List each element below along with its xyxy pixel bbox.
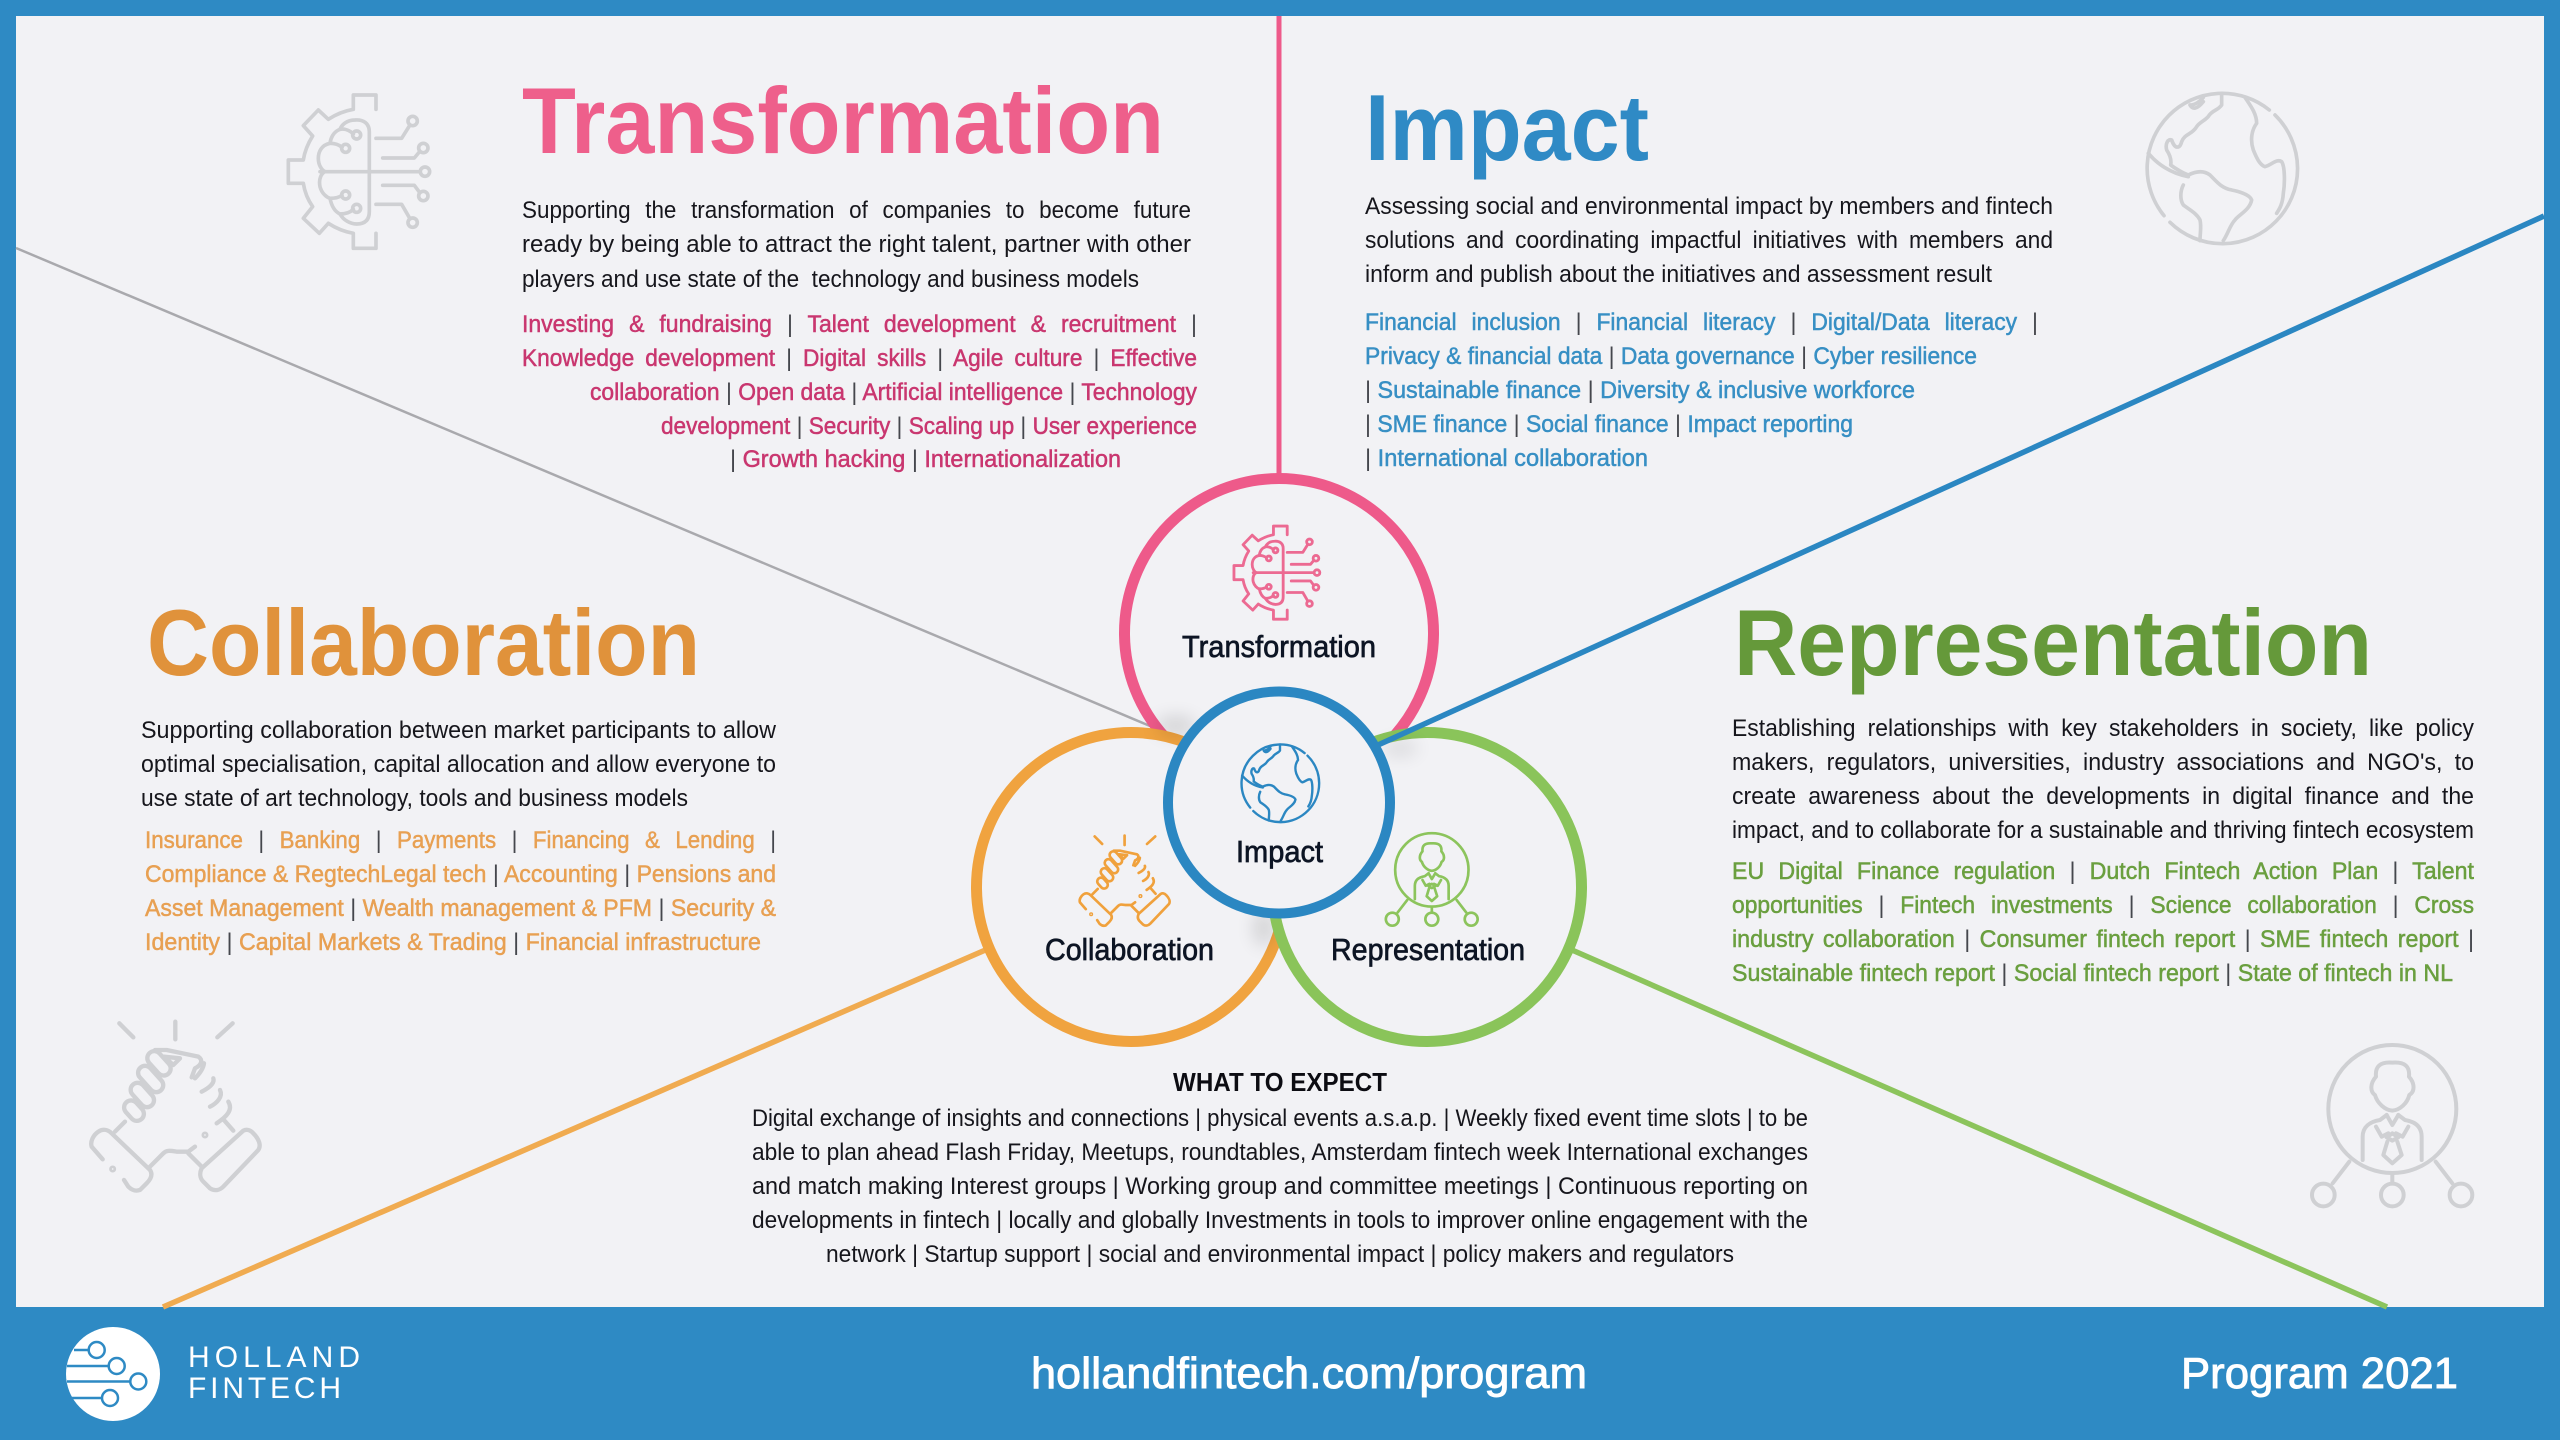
- heading: transformation: Transformation: [522, 68, 1164, 173]
- description: collaboration: Supporting collaboration between market participants to allow: [141, 717, 777, 744]
- logo: holland fintech: HOLLAND: [188, 1341, 360, 1374]
- description: representation: Establishing relationships with key stakeholders in society, like policy: [1732, 715, 2474, 742]
- label: collaboration: Collaboration: [1045, 932, 1214, 967]
- description: collaboration: use state of art technology, tools and business models: [141, 785, 688, 812]
- what to expect: [752, 1067, 1808, 1268]
- topic list: impact: Financial inclusion | Financial literacy | Digital/Data literacy |: [1365, 309, 2038, 336]
- icon: handshake: [1080, 836, 1170, 926]
- heading: impact: Impact: [1365, 75, 1649, 180]
- description: transformation: [522, 197, 1191, 293]
- connector line: grey divider: [16, 248, 1150, 726]
- background icon: globe: [2147, 93, 2298, 244]
- topic list: collaboration: Insurance | Banking | Payments | Financing & Lending |: [145, 827, 776, 854]
- heading: collaboration: Collaboration: [147, 590, 700, 695]
- icon: person network: [1386, 833, 1478, 926]
- body text: what to expect: developments in fintech | locally and globally Investments in tools to improver online engagement with the: [752, 1207, 1808, 1234]
- body text: what to expect: network | Startup support | social and environmental impact | policy makers and regulators: [826, 1241, 1734, 1268]
- connector line: transformation: [1276, 16, 1282, 480]
- label: transformation: Transformation: [1182, 629, 1376, 664]
- body text: what to expect: able to plan ahead Flash Friday, Meetups, roundtables, Amsterdam fintech week International exchanges: [752, 1139, 1808, 1166]
- description: transformation: ready by being able to attract the right talent, partner with other: [522, 231, 1191, 258]
- background icon: handshake: [91, 1022, 260, 1191]
- topic list: transformation: Knowledge development | Digital skills | Agile culture | Effective: [522, 345, 1197, 372]
- footer: [66, 1327, 2458, 1421]
- topic list: transformation: development | Security | Scaling up | User experience: [661, 413, 1197, 440]
- label: impact: Impact: [1236, 834, 1323, 869]
- description: representation: impact, and to collaborate for a sustainable and thriving fintech ecosystem: [1732, 817, 2474, 844]
- description: representation: create awareness about the developments in digital finance and the: [1732, 783, 2474, 810]
- topic list: transformation: | Growth hacking | Internationalization: [730, 446, 1121, 473]
- description: transformation: Supporting the transformation of companies to become future: [522, 197, 1191, 224]
- topic list: collaboration: [145, 827, 776, 956]
- body text: what to expect: [752, 1105, 1808, 1268]
- description: impact: Assessing social and environmental impact by members and fintech: [1365, 193, 2053, 220]
- topic list: representation: [1732, 858, 2474, 987]
- panel: impact: [1365, 75, 2053, 472]
- icon: brain gear: [1234, 526, 1320, 619]
- topic list: transformation: Investing & fundraising | Talent development & recruitment |: [522, 311, 1197, 338]
- topic list: transformation: collaboration | Open data | Artificial intelligence | Technology: [590, 379, 1197, 406]
- program year: Program 2021: [2181, 1349, 2458, 1398]
- topic list: representation: industry collaboration | Consumer fintech report | SME fintech report |: [1732, 926, 2474, 953]
- circle: transformation: [1124, 478, 1434, 788]
- topic list: impact: [1365, 309, 2038, 472]
- topic list: transformation: [522, 311, 1197, 473]
- panel: transformation: [522, 68, 1197, 473]
- topic list: collaboration: Asset Management | Wealth management & PFM | Security &: [145, 895, 776, 922]
- topic list: collaboration: Compliance & RegtechLegal tech | Accounting | Pensions and: [145, 861, 776, 888]
- background icon: person network: [2312, 1045, 2472, 1206]
- logo: holland fintech: [66, 1327, 360, 1421]
- description: impact: inform and publish about the initiatives and assessment result: [1365, 261, 1992, 288]
- heading: what to expect: WHAT TO EXPECT: [1173, 1067, 1387, 1097]
- body text: what to expect: and match making Interest groups | Working group and committee meetings | Continuous reporting on: [752, 1173, 1808, 1200]
- connector line: impact: [1378, 216, 2544, 745]
- topic list: representation: EU Digital Finance regulation | Dutch Fintech Action Plan | Talent: [1732, 858, 2474, 885]
- shadow accents: [1156, 717, 1274, 946]
- description: collaboration: [141, 717, 777, 812]
- panel: representation: [1732, 590, 2474, 987]
- circle: impact: [1168, 692, 1390, 914]
- description: impact: solutions and coordinating impactful initiatives with members and: [1365, 227, 2053, 254]
- venn diagram: [976, 216, 2544, 1042]
- description: representation: makers, regulators, universities, industry associations and NGO's, to: [1732, 749, 2474, 776]
- label: representation: Representation: [1331, 932, 1525, 967]
- icon: globe: [1242, 744, 1319, 822]
- description: impact: [1365, 193, 2053, 288]
- circle: representation: [1272, 732, 1582, 1042]
- topic list: impact: | International collaboration: [1365, 445, 1648, 472]
- logo: holland fintech: FINTECH: [188, 1372, 341, 1405]
- topic list: impact: | Sustainable finance | Diversity & inclusive workforce: [1365, 377, 1915, 404]
- circle: collaboration: [976, 732, 1286, 1042]
- heading: representation: Representation: [1734, 590, 2372, 695]
- background icon: brain gear: [288, 95, 430, 248]
- topic list: representation: Sustainable fintech report | Social fintech report | State of fintech in NL: [1732, 960, 2453, 987]
- topic list: collaboration: Identity | Capital Markets & Trading | Financial infrastructure: [145, 929, 761, 956]
- connector line: representation: [1572, 950, 2387, 1307]
- description: representation: [1732, 715, 2474, 844]
- topic list: impact: Privacy & financial data | Data governance | Cyber resilience: [1365, 343, 1977, 370]
- topic list: impact: | SME finance | Social finance | Impact reporting: [1365, 411, 1853, 438]
- connector line: collaboration: [163, 948, 990, 1307]
- topic list: representation: opportunities | Fintech investments | Science collaboration | Cross: [1732, 892, 2474, 919]
- description: transformation: players and use state of the technology and business models: [522, 266, 1139, 293]
- panel: collaboration: [141, 590, 777, 956]
- body text: what to expect: Digital exchange of insights and connections | physical events a.s.a.p. | Weekly fixed event time slots | to be: [752, 1105, 1808, 1132]
- description: collaboration: optimal specialisation, capital allocation and allow everyone to: [141, 751, 776, 778]
- url: hollandfintech.com/program: [1031, 1349, 1587, 1398]
- shadow accent right: [1382, 740, 1418, 756]
